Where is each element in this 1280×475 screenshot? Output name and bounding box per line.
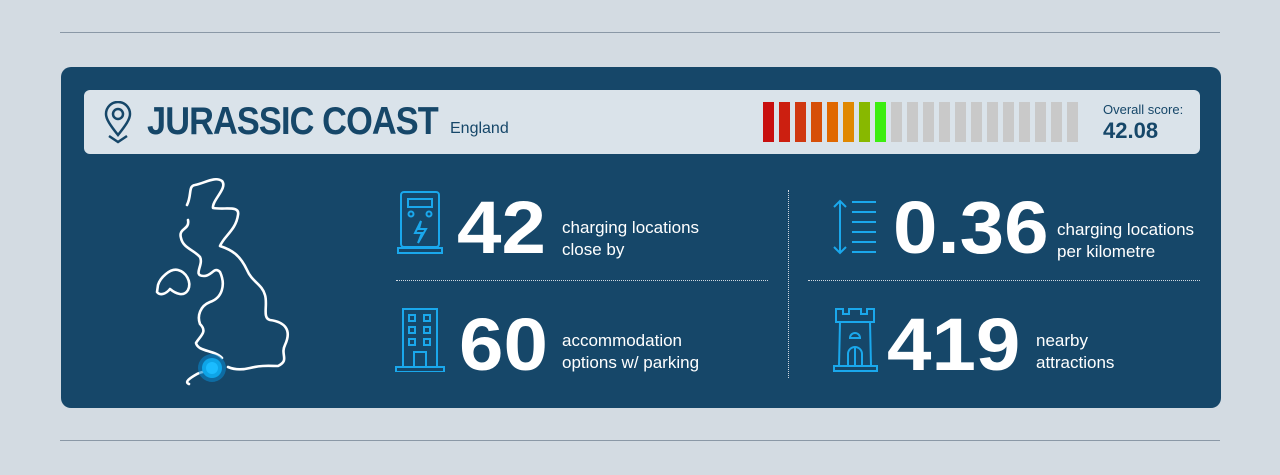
overall score: Overall score: [1103,102,1183,117]
stat: per km [833,186,1194,269]
stat: attractions: nearby [1036,331,1088,350]
stat: accommodation [395,303,699,386]
map: UK outline [156,178,290,386]
icon: charger [397,191,443,254]
stat: accommodation: options w/ parking [562,353,699,372]
stat: accommodation: accommodation [562,331,682,350]
icon: location dot [198,354,226,382]
stat: charging locations [397,186,699,269]
stat: charging locations: charging locations [562,218,699,237]
stat: attractions [833,303,1114,386]
stat: attractions: 419 [887,303,1020,386]
icon: location pin [104,101,132,144]
icon: vertical arrow with lines [833,200,876,254]
title: JURASSIC COAST [147,100,438,143]
stat: per km: per kilometre [1057,242,1155,261]
stat: charging locations: 42 [457,186,546,269]
stat: attractions: attractions [1036,353,1114,372]
header bar [84,90,1200,154]
stat: per km: charging locations [1057,220,1194,239]
stat: charging locations: close by [562,240,624,259]
stat: per km: 0.36 [893,186,1049,269]
score bar [763,102,1078,142]
panel: main card [61,67,1221,408]
stat: accommodation: 60 [459,303,548,386]
subtitle: England [450,120,509,137]
overall score [1103,102,1183,143]
icon: building [395,308,445,372]
overall score: 42.08 [1103,118,1158,143]
icon: castle tower [833,308,878,372]
divider lines [396,280,768,281]
